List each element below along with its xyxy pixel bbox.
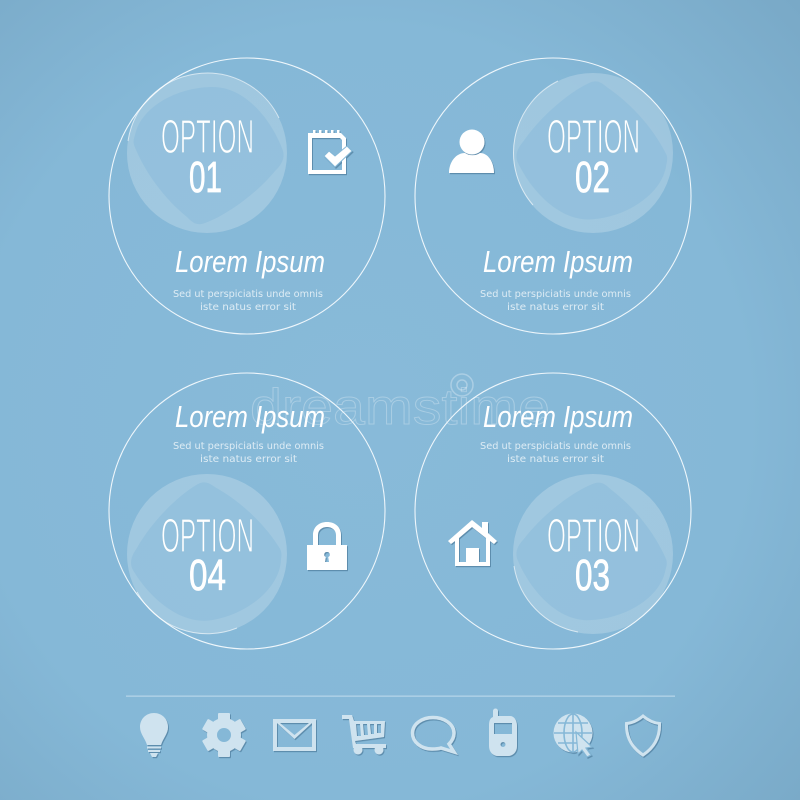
- icon row: [140, 708, 660, 757]
- option 01 label: OPTION: [161, 111, 254, 164]
- body text 03: [480, 441, 631, 465]
- icon: padlock: [307, 522, 347, 570]
- icon: house: [448, 520, 497, 566]
- lens 02: [511, 73, 673, 233]
- lens 04: [119, 471, 291, 634]
- icon: person: [449, 130, 494, 173]
- number 01: 01: [189, 153, 222, 202]
- icon: globe with cursor: [554, 714, 592, 757]
- heading 02: Lorem Ipsum: [483, 244, 633, 279]
- panel: option 02: [415, 58, 691, 334]
- option 04 label: OPTION: [161, 510, 254, 563]
- icon: shopping cart: [342, 715, 386, 754]
- body text 01: iste natus error sit: [200, 302, 296, 313]
- panel: option 03: [415, 373, 691, 649]
- lens 03: [513, 474, 673, 634]
- body text 04: iste natus error sit: [200, 454, 297, 465]
- lens 01: [127, 73, 287, 233]
- number 04: 04: [189, 551, 226, 600]
- body text 03: Sed ut perspiciatis unde omnis: [480, 441, 631, 452]
- heading 03: Lorem Ipsum: [483, 399, 633, 434]
- icon: envelope: [273, 719, 316, 751]
- heading 01: Lorem Ipsum: [175, 244, 325, 279]
- icon: mobile phone: [489, 708, 517, 756]
- number 02: 02: [575, 153, 610, 202]
- outer ring 04: [109, 373, 385, 649]
- icon: speech bubble: [412, 718, 454, 752]
- body text 02: [480, 289, 631, 313]
- icon: light bulb: [140, 713, 168, 757]
- outer ring 02: [415, 58, 691, 334]
- watermark: dreamstime: [250, 379, 550, 435]
- body text 03: iste natus error sit: [507, 454, 604, 465]
- heading 04: Lorem Ipsum: [175, 399, 325, 434]
- outer ring 01: [109, 58, 385, 334]
- icon: gear: [202, 713, 246, 757]
- body text 01: Sed ut perspiciatis unde omnis: [173, 289, 323, 300]
- body text 02: iste natus error sit: [507, 302, 604, 313]
- icon: shield: [626, 716, 660, 755]
- option 02 label: OPTION: [547, 111, 640, 164]
- body text 02: Sed ut perspiciatis unde omnis: [480, 289, 631, 300]
- panel: option 01: [109, 58, 385, 334]
- number 03: 03: [575, 551, 610, 600]
- icon: notepad check: [308, 130, 352, 174]
- body text 04: [173, 441, 324, 465]
- option 03 label: OPTION: [547, 510, 640, 563]
- body text 04: Sed ut perspiciatis unde omnis: [173, 441, 324, 452]
- body text 01: [173, 289, 323, 313]
- panel: option 04: [109, 373, 385, 649]
- outer ring 03: [415, 373, 691, 649]
